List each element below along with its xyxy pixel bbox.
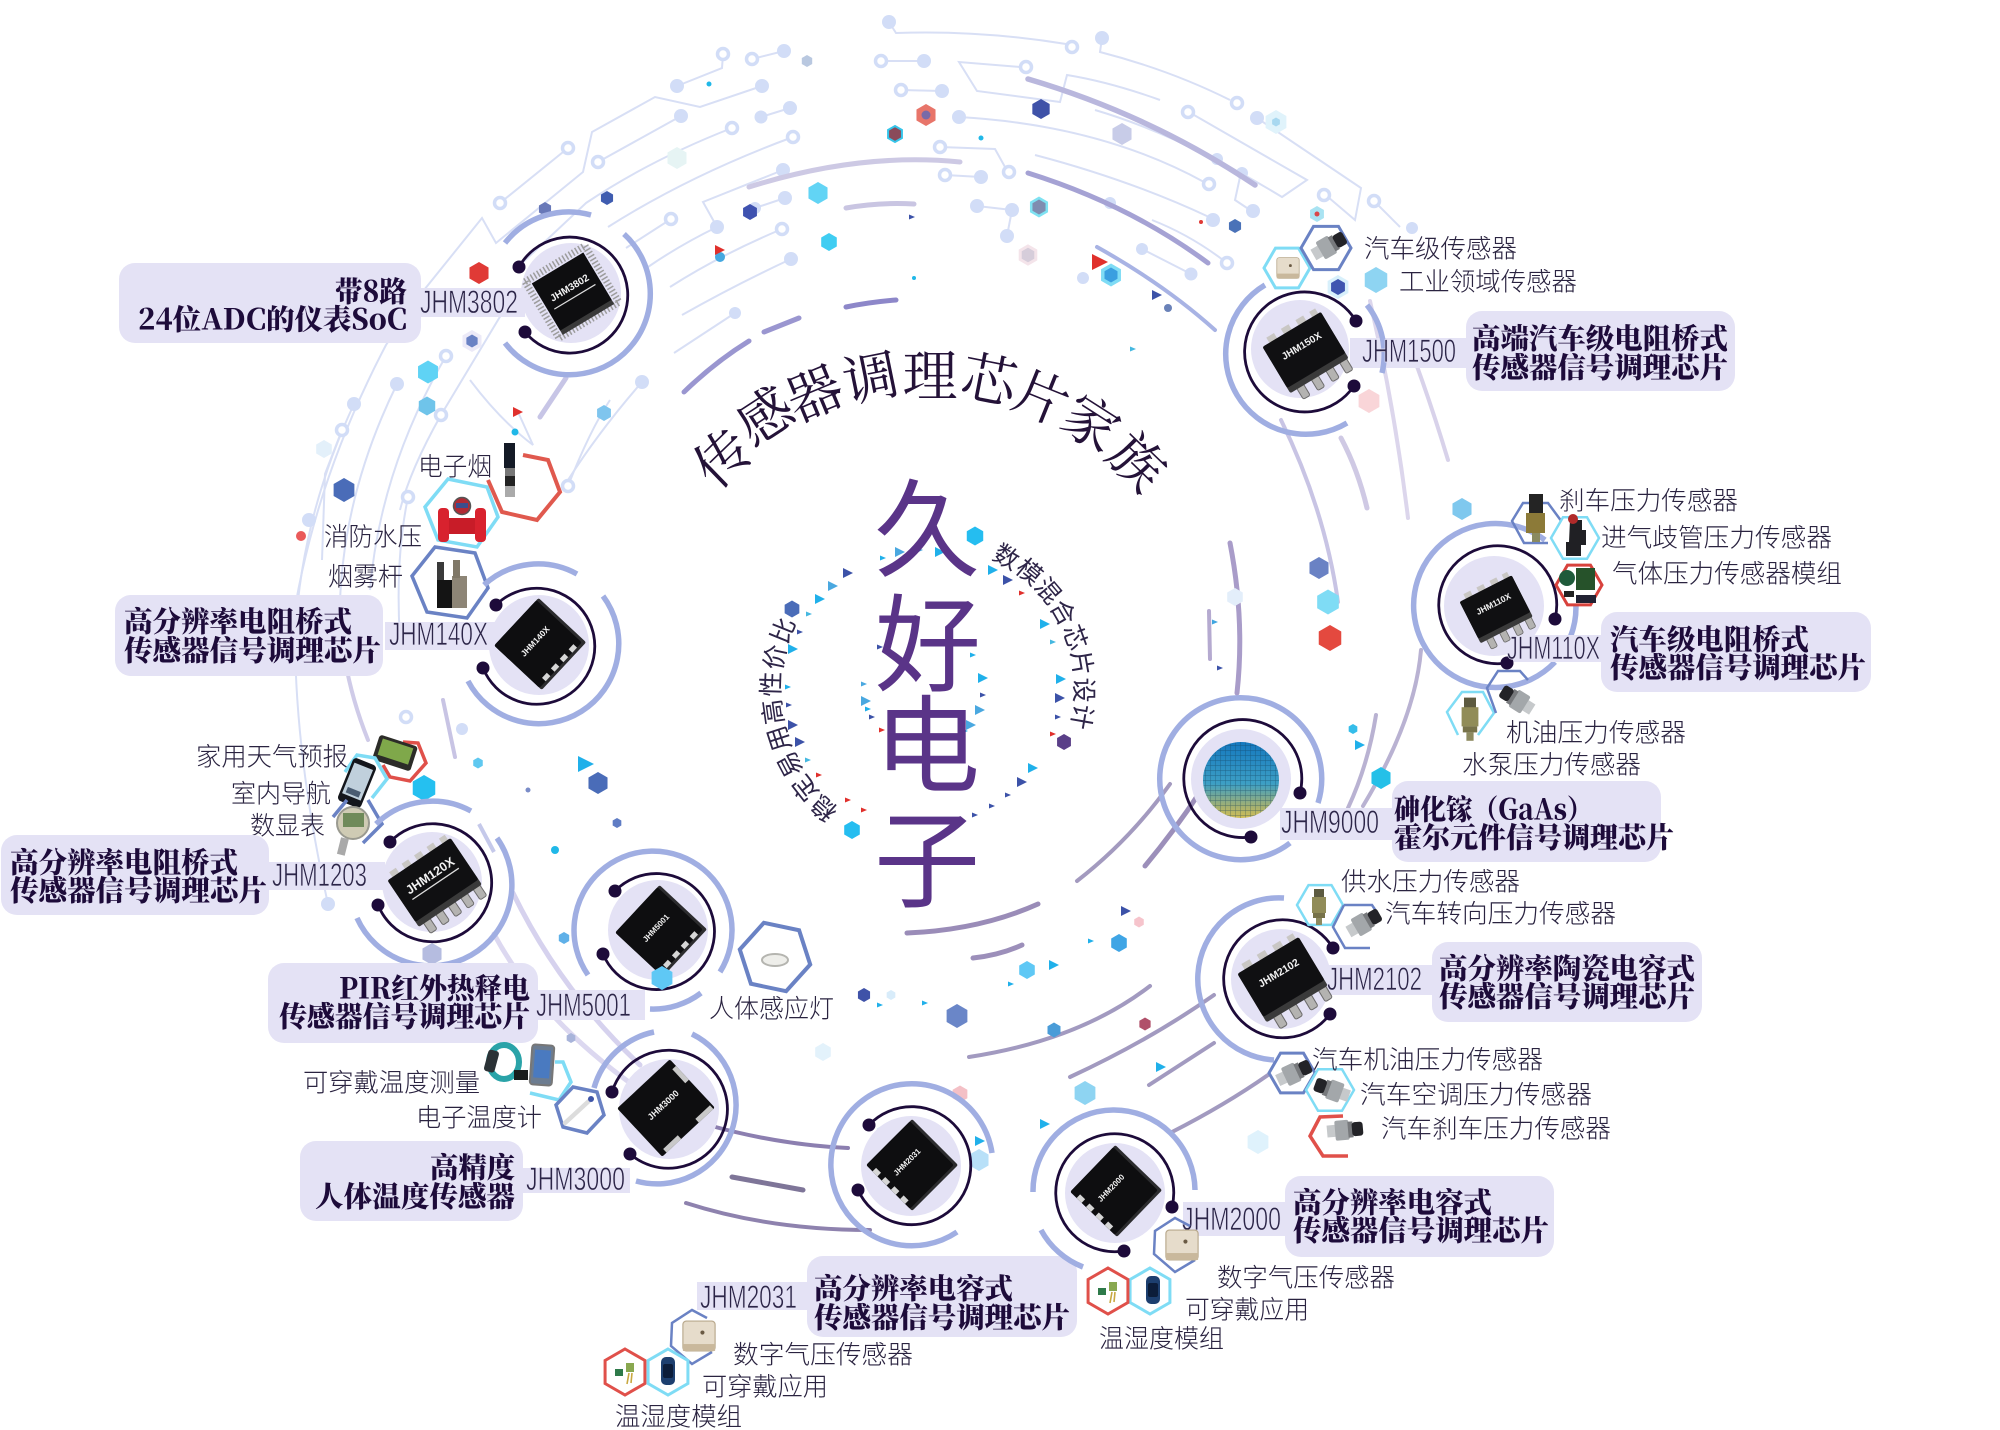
caption panel: JHM110X: [1601, 612, 1871, 692]
chip: JHM3000: JHM3000: [646, 1088, 681, 1122]
caption panel: JHM2000: [1285, 1176, 1554, 1257]
chip: JHM2031: JHM2031: [892, 1146, 923, 1178]
icon: body-sensing lamp: [733, 919, 817, 995]
icon: water supply sensor: [1297, 885, 1343, 925]
caption strip: JHM2031: [697, 1282, 812, 1310]
label: 机油压力传感器: 机油压力传感器: [1506, 712, 1686, 750]
module: JHM2102: [1198, 862, 1702, 1156]
icon: humidity module: [1088, 1268, 1128, 1314]
caption: JHM140X: 传感器信号调理芯片: [124, 628, 381, 670]
icon: weather station: [372, 734, 426, 781]
model: JHM3802: JHM3802: [420, 284, 518, 320]
caption panel: JHM140X: [115, 595, 383, 676]
brand name: vertical: 子: [874, 776, 980, 930]
label: 家用天气预报: 家用天气预报: [196, 736, 348, 774]
model: JHM2102: JHM2102: [1327, 961, 1422, 997]
title: arc heading: 芯: [955, 332, 1026, 420]
caption: JHM5001: [279, 966, 530, 1036]
slogan: right arc: 数: [987, 534, 1027, 578]
slogan: right arc: 芯: [1055, 619, 1097, 655]
label: 气体压力传感器模组: 气体压力传感器模组: [1612, 554, 1842, 590]
chip: JHM1500: JHM150X: [1280, 330, 1324, 363]
chip: JHM140X: [494, 598, 586, 690]
slogan: right arc: 片: [1063, 648, 1103, 678]
caption: JHM2031: [814, 1266, 1070, 1336]
module: JHM110X: [1414, 480, 1871, 782]
label: 可穿戴应用: 可穿戴应用: [702, 1366, 828, 1404]
icon: vape device: [412, 547, 488, 618]
icon: steering sensor: [1333, 905, 1385, 948]
caption: JHM2031: 高分辨率电容式: [814, 1266, 1013, 1308]
caption panel: JHM9000: [1392, 781, 1661, 862]
model: JHM1500: JHM1500: [1362, 333, 1456, 369]
module: JHM5001: [268, 851, 834, 1043]
chip: JHM110X: [1457, 571, 1537, 652]
label: 刹车压力传感器: 刹车压力传感器: [1559, 480, 1738, 518]
title: arc heading: 片: [1003, 347, 1083, 441]
label: 室内导航: 室内导航: [231, 774, 331, 810]
chip: JHM2000: JHM2000: [1096, 1172, 1127, 1204]
brand name: vertical: 好: [875, 560, 981, 714]
label: 电子烟: 电子烟: [418, 446, 492, 484]
label: 进气歧管压力传感器: 进气歧管压力传感器: [1601, 518, 1832, 554]
module: JHM9000: [1160, 698, 1674, 862]
caption: JHM9000: 霍尔元件信号调理芯片: [1394, 816, 1674, 856]
chip: JHM5001: JHM5001: [641, 912, 672, 944]
caption: JHM110X: 汽车级电阻桥式: [1610, 618, 1809, 658]
module: JHM1203: [1, 801, 512, 966]
caption: JHM140X: [124, 600, 381, 670]
label: 可穿戴温度测量: 可穿戴温度测量: [303, 1062, 480, 1100]
application icons: JHM3000: [303, 1044, 604, 1134]
chip: JHM5001: [615, 885, 707, 977]
chip: JHM110X: JHM110X: [1474, 591, 1513, 617]
slogan: right arc: 合: [1042, 592, 1086, 632]
caption panel: JHM3000: [300, 1141, 523, 1221]
icon: industrial sensor: [1264, 248, 1310, 288]
model: JHM9000: JHM9000: [1281, 804, 1379, 840]
caption panel: JHM5001: [268, 963, 538, 1043]
module: JHM1500: [1226, 226, 1735, 434]
chip: JHM2031: [866, 1119, 958, 1211]
title: arc heading: 理: [902, 332, 958, 412]
label: 电子温度计: 电子温度计: [416, 1098, 542, 1134]
background: circuit traces: [290, 15, 1472, 1230]
label: 水泵压力传感器: 水泵压力传感器: [1462, 744, 1641, 782]
slogan: left arc: 性: [752, 671, 788, 697]
brand name: vertical: [874, 445, 981, 930]
chip: JHM1203: JHM120X: [403, 854, 458, 897]
icon: humidity module: [605, 1349, 645, 1395]
module: JHM3802: [119, 212, 650, 375]
application icons: JHM140X: [324, 443, 560, 618]
label: 温湿度模组: 温湿度模组: [1099, 1318, 1224, 1356]
title: arc heading: 器: [772, 343, 854, 437]
slogan: right arc: 混: [1027, 569, 1071, 611]
caption: JHM140X: 高分辨率电阻桥式: [124, 600, 352, 640]
label: 数字气压传感器: 数字气压传感器: [1217, 1258, 1395, 1294]
caption: JHM1203: [10, 840, 267, 910]
caption: JHM1203: 高分辨率电阻桥式: [10, 840, 238, 882]
title: arc heading: 感: [718, 365, 808, 461]
caption: JHM1500: 高端汽车级电阻桥式: [1472, 316, 1728, 358]
caption: JHM1203: 传感器信号调理芯片: [10, 868, 267, 910]
module: JHM140X: [115, 564, 619, 724]
caption: JHM9000: 砷化镓（GaAs）: [1394, 788, 1593, 828]
chip: JHM3802: JHM3802: [549, 272, 592, 304]
icon: automotive sensor: [1301, 226, 1351, 270]
label: 消防水压: 消防水压: [324, 516, 422, 554]
title: arc heading: 调: [835, 330, 905, 418]
label: 烟雾杆: 烟雾杆: [328, 556, 403, 594]
slogan: left arc: 定: [782, 768, 826, 810]
slogan: right arc: 模: [1009, 549, 1051, 593]
module: JHM2000: [1033, 1110, 1554, 1356]
icon: engine oil sensor: [1269, 1053, 1315, 1093]
label: 工业领域传感器: 工业领域传感器: [1399, 262, 1577, 298]
model: JHM5001: JHM5001: [536, 987, 631, 1023]
caption: JHM5001: 传感器信号调理芯片: [279, 994, 530, 1036]
caption: JHM2102: [1439, 946, 1695, 1016]
chip: JHM1500: [1259, 307, 1355, 404]
slogan: right arc: [987, 534, 1103, 732]
model: JHM3000: JHM3000: [526, 1161, 625, 1197]
icon: A/C sensor: [1306, 1069, 1354, 1111]
icon: engine oil sensor: [1447, 692, 1494, 741]
caption: JHM2102: 高分辨率陶瓷电容式: [1439, 946, 1695, 988]
model: JHM1203: JHM1203: [272, 857, 367, 893]
title: arc heading: 家: [1049, 372, 1137, 468]
caption: JHM2000: [1293, 1180, 1549, 1250]
central dotted triangle rings: [785, 547, 1066, 822]
caption: JHM9000: [1394, 788, 1674, 856]
caption: JHM110X: [1610, 618, 1866, 686]
label: 汽车刹车压力传感器: 汽车刹车压力传感器: [1381, 1108, 1611, 1146]
label: 数显表: 数显表: [250, 806, 325, 842]
icon: brake sensor: [1310, 1116, 1364, 1156]
brand name: vertical: 久: [874, 445, 980, 599]
caption: JHM2102: 传感器信号调理芯片: [1439, 974, 1695, 1016]
caption: JHM1500: 传感器信号调理芯片: [1472, 346, 1728, 386]
caption: JHM5001: PIR红外热释电: [339, 966, 530, 1008]
chip: JHM2000: [1070, 1145, 1162, 1237]
model: JHM110X: JHM110X: [1507, 630, 1600, 666]
icon: water pump sensor: [1487, 671, 1538, 718]
caption panel: JHM2102: [1432, 942, 1702, 1022]
icon: brake pressure sensor: [1512, 494, 1562, 543]
label: 汽车级传感器: 汽车级传感器: [1364, 228, 1517, 266]
model: JHM140X: JHM140X: [389, 616, 488, 652]
title: arc heading: 传: [673, 407, 767, 503]
chip: JHM1203: [384, 833, 489, 937]
chip: JHM3802: [525, 246, 619, 338]
slogan: left arc: 稳: [802, 787, 844, 831]
slogan: right arc: 计: [1063, 702, 1103, 732]
caption panel: JHM1203: [1, 835, 269, 915]
label: 数字气压传感器: 数字气压传感器: [733, 1334, 913, 1372]
icon: wearable: [648, 1349, 688, 1395]
chip: JHM2102: JHM2102: [1256, 956, 1302, 990]
chip: JHM3000: [617, 1059, 715, 1157]
caption: JHM2000: 高分辨率电容式: [1293, 1180, 1492, 1222]
chip: GaAs wafer: [1203, 742, 1279, 818]
icon: intake manifold sensor: [1551, 514, 1599, 559]
model: JHM2031: JHM2031: [700, 1279, 797, 1315]
icon: electronic thermometer: [556, 1087, 604, 1133]
label: 人体感应灯: 人体感应灯: [709, 988, 834, 1026]
icon: digital gauge: [333, 800, 382, 856]
caption: JHM3000: [315, 1146, 515, 1216]
icon: wearable: [1130, 1268, 1170, 1314]
icon: e-cigarette: [488, 443, 560, 520]
slogan: left arc: 高: [752, 697, 792, 727]
slogan: left arc: [752, 612, 844, 831]
slogan: left arc: 比: [761, 612, 803, 648]
icon: digital barometric sensor: [1154, 1218, 1198, 1272]
icon: indoor navigation: [337, 755, 387, 809]
caption: JHM110X: 传感器信号调理芯片: [1610, 646, 1866, 686]
title: arc heading: 族: [1093, 411, 1187, 507]
icon: fire water pressure: [425, 479, 498, 547]
label: 汽车转向压力传感器: 汽车转向压力传感器: [1385, 894, 1616, 930]
slogan: left arc: 易: [767, 746, 811, 784]
chip: JHM2102: [1234, 932, 1334, 1033]
slogan: right arc: 设: [1067, 677, 1103, 703]
caption panel: JHM1500: [1466, 311, 1735, 391]
module: JHM3000: [300, 1032, 736, 1221]
slogan: left arc: 价: [754, 641, 794, 673]
application icons: JHM1203: [196, 734, 426, 856]
caption: JHM3802: [138, 270, 407, 338]
caption panel: JHM3802: [119, 263, 421, 343]
caption: JHM1500: [1472, 316, 1728, 386]
caption: JHM2000: 传感器信号调理芯片: [1293, 1208, 1549, 1250]
caption: JHM3000: 人体温度传感器: [315, 1174, 515, 1216]
model: JHM2000: JHM2000: [1182, 1201, 1281, 1237]
caption: JHM2031: 传感器信号调理芯片: [814, 1296, 1070, 1336]
caption panel: JHM2031: [807, 1256, 1077, 1337]
module: JHM2031: [605, 1084, 1077, 1430]
icon: wearable temperature: [483, 1044, 571, 1100]
label: 可穿戴应用: 可穿戴应用: [1185, 1290, 1309, 1326]
title: arc heading: [673, 330, 1187, 507]
label: 供水压力传感器: 供水压力传感器: [1341, 862, 1520, 898]
chip: JHM140X: JHM140X: [519, 624, 552, 659]
icon: gas pressure module: [1556, 565, 1602, 605]
label: 汽车机油压力传感器: 汽车机油压力传感器: [1312, 1040, 1543, 1076]
icon: hexagon marker: [1365, 267, 1387, 293]
brand name: vertical: 电: [874, 661, 980, 815]
caption: JHM3802: 24位ADC的仪表SoC: [138, 298, 407, 338]
slogan: left arc: 用: [757, 722, 799, 756]
icon: digital barometric sensor: [671, 1310, 715, 1364]
label: 汽车空调压力传感器: 汽车空调压力传感器: [1360, 1074, 1592, 1112]
caption: JHM3802: 带8路: [334, 270, 407, 310]
caption: JHM3000: 高精度: [430, 1146, 515, 1186]
